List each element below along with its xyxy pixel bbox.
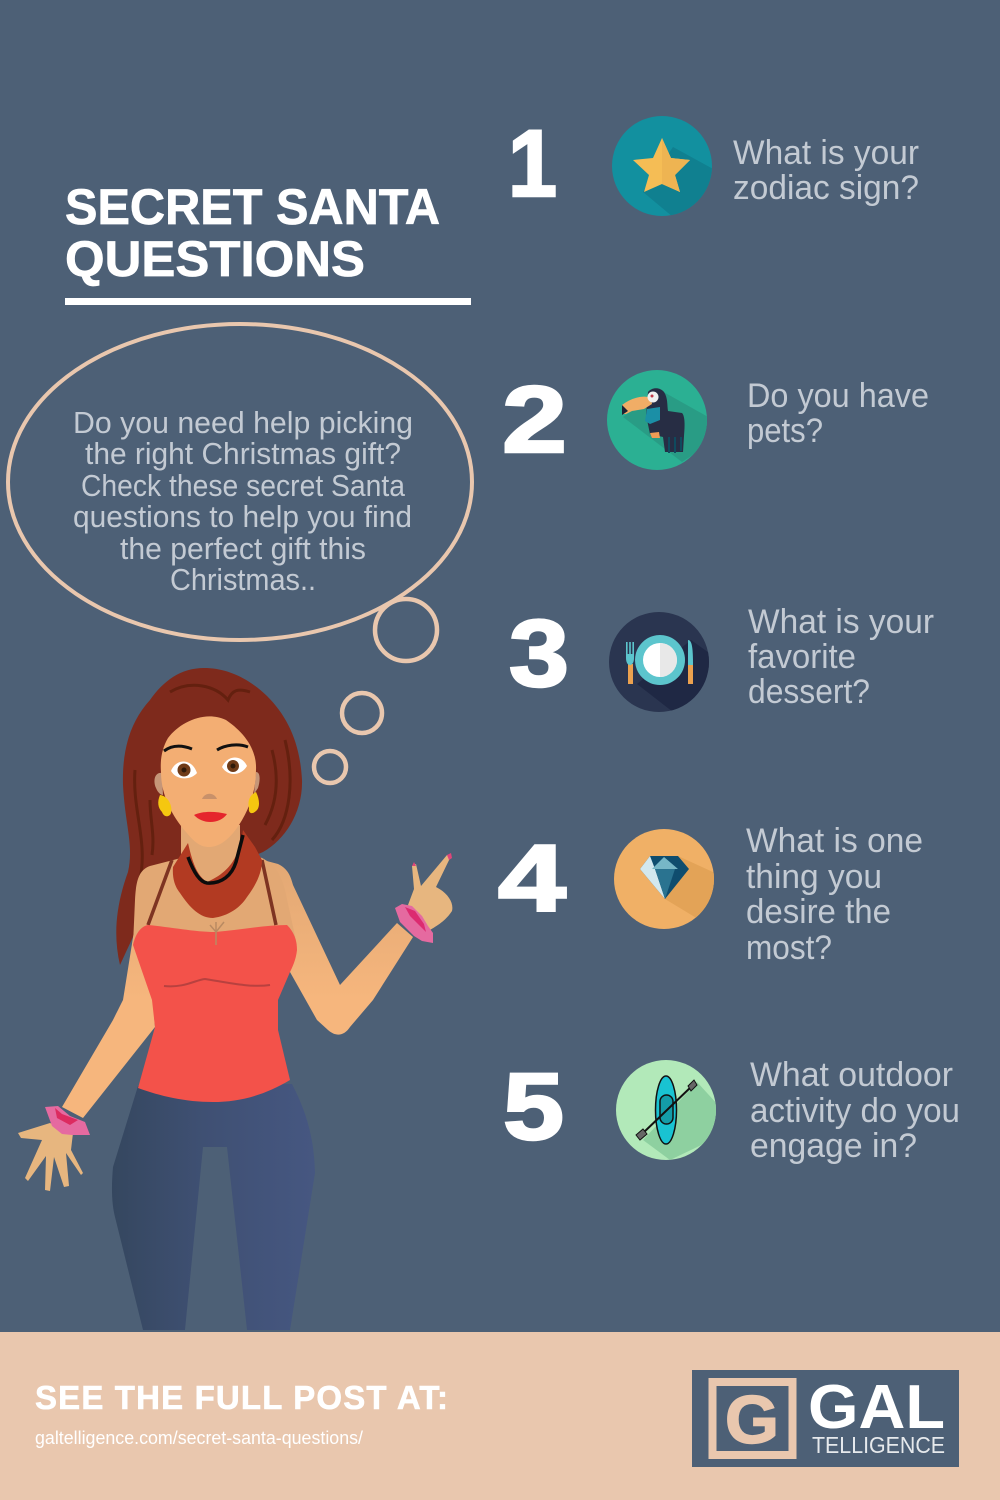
right arm [263, 860, 413, 1035]
question 5 [503, 1054, 960, 1165]
question 4: desire the [746, 893, 891, 931]
question 1: zodiac sign? [733, 169, 919, 207]
logo [692, 1370, 959, 1467]
title: SECRET SANTA [65, 179, 440, 235]
icon: plate and cutlery [609, 612, 712, 712]
left arm [62, 925, 158, 1118]
thought bubble with intro text: the perfect gift this [120, 531, 366, 566]
hair [116, 668, 302, 965]
ears [154, 772, 260, 795]
question 3: What is your [748, 603, 934, 641]
raised hand [408, 855, 452, 930]
thought bubble with intro text: questions to help you find [73, 499, 412, 534]
icon: kayak [616, 1060, 718, 1160]
icon: star [612, 116, 715, 217]
question 5: activity do you [750, 1092, 960, 1130]
eyes [171, 758, 247, 778]
question 3: 3 [509, 601, 569, 707]
question 2: pets? [747, 412, 823, 450]
thought bubble with intro text: Do you need help picking [73, 405, 413, 440]
thought bubble with intro text: Christmas.. [170, 562, 316, 597]
question 5: engage in? [750, 1127, 917, 1165]
logo: TELLIGENCE [812, 1432, 945, 1458]
jeans [112, 1084, 315, 1330]
question 4: most? [746, 929, 832, 967]
nose and lips [202, 794, 217, 799]
question 5: 5 [503, 1054, 564, 1160]
thought bubble with intro text: Check these secret Santa [81, 468, 406, 503]
right scrunchie [395, 904, 433, 943]
question 1: 1 [508, 111, 557, 217]
scarf [173, 830, 262, 918]
question 4 [498, 822, 923, 967]
question 4: 4 [498, 826, 566, 932]
title: QUESTIONS [65, 231, 365, 287]
question 2 [502, 367, 929, 473]
logo: GAL [808, 1373, 945, 1442]
footer call to action: SEE THE FULL POST AT: [35, 1379, 448, 1416]
question 3 [509, 601, 934, 712]
illustration: woman [18, 668, 452, 1330]
question 3: favorite [748, 638, 856, 676]
question 4: thing you [746, 858, 882, 896]
footer url: galtelligence.com/secret-santa-questions/ [35, 1428, 363, 1448]
left scrunchie [45, 1106, 90, 1135]
thought bubble with intro text: the right Christmas gift? [85, 436, 401, 471]
left hand [18, 1123, 83, 1191]
red top [133, 925, 297, 1102]
earrings [158, 795, 171, 816]
icon: toucan [607, 370, 710, 470]
question 5: What outdoor [750, 1056, 953, 1094]
icon: diamond [614, 829, 715, 929]
thought bubble with intro text [8, 324, 472, 783]
title [65, 179, 471, 305]
question 3: dessert? [748, 673, 870, 711]
logo: G [725, 1382, 779, 1458]
strap lines [148, 860, 276, 925]
question 1: What is your [733, 134, 919, 172]
question 2: 2 [502, 367, 567, 473]
question 1 [508, 111, 919, 217]
face [161, 716, 256, 847]
eyebrows [164, 745, 248, 751]
footer band [0, 1332, 1000, 1500]
torso and neck [133, 825, 297, 945]
nails [412, 853, 452, 866]
necklace [210, 922, 224, 945]
question 4: What is one [746, 822, 923, 860]
question 2: Do you have [747, 377, 929, 415]
